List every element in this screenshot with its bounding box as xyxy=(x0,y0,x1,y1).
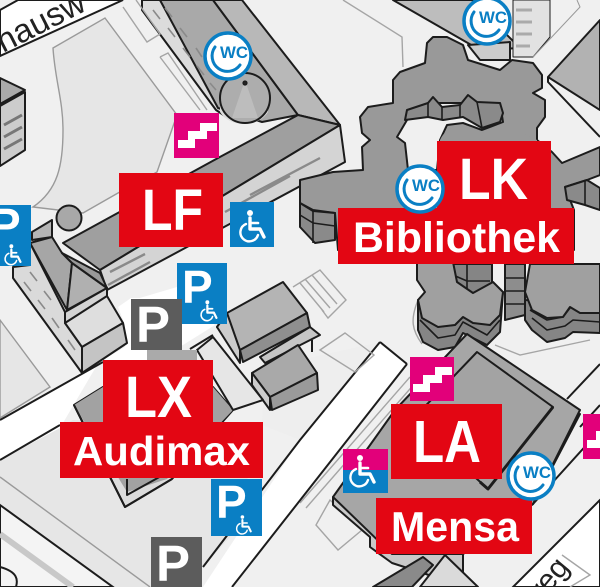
icon: WC library xyxy=(397,166,443,212)
rotunda on LF wing xyxy=(220,73,270,124)
label: LX Audimax: Audimax xyxy=(73,428,250,474)
white yard south of LF xyxy=(133,287,177,300)
label: LX Audimax xyxy=(60,360,263,478)
icon: disabled parking west xyxy=(0,199,31,266)
building: LF main wing xyxy=(63,115,345,290)
road: west arm xyxy=(0,298,215,460)
label: LF: LF xyxy=(142,178,203,243)
icon: stairs centre xyxy=(410,357,454,401)
library east facade xyxy=(565,180,600,210)
icon: parking north: P xyxy=(136,296,170,353)
building: LF west end xyxy=(13,206,127,373)
small building east of Audimax xyxy=(217,282,320,410)
road: lower left xyxy=(0,505,113,587)
icon: WC top centre xyxy=(464,0,510,44)
label: LX Audimax: LX xyxy=(125,365,192,430)
library courtyard xyxy=(397,103,503,170)
library central lobe xyxy=(440,126,537,175)
icon: disabled parking south: P xyxy=(216,476,247,528)
icon: wheelchair with lift xyxy=(343,449,388,493)
library narrow tower xyxy=(505,264,525,320)
label: LK Bibliothek: Bibliothek xyxy=(353,214,560,262)
icon: wheelchair access xyxy=(230,202,274,247)
building: top centre towers xyxy=(393,0,600,137)
icon: WC top centre: WC xyxy=(479,8,507,27)
building: left edge xyxy=(0,78,25,166)
label: LK Bibliothek: LK xyxy=(459,147,528,212)
icon: stairs east xyxy=(583,414,600,459)
lawn areas xyxy=(0,18,380,587)
icon: disabled parking centre: P xyxy=(182,261,213,313)
label: LK Bibliothek xyxy=(338,141,574,264)
building: LF north wing xyxy=(142,0,340,125)
road: bottom right with street name xyxy=(513,500,600,587)
icon: WC Mensa xyxy=(508,453,554,499)
road: central diagonal xyxy=(203,342,407,587)
icon: parking north xyxy=(131,296,182,353)
label: LA Mensa xyxy=(376,404,532,554)
building: LX Audimax xyxy=(74,337,263,507)
icon: disabled parking centre xyxy=(177,261,227,324)
library lower right roof xyxy=(525,264,600,318)
icon: parking south xyxy=(151,535,202,587)
road lines xyxy=(0,335,407,587)
label: LA Mensa: LA xyxy=(413,409,481,475)
library lower left roof xyxy=(417,262,503,327)
building: LA Mensa xyxy=(333,334,600,587)
label: LA Mensa: Mensa xyxy=(391,503,520,550)
outdoor stairs and paths xyxy=(123,0,590,587)
label: LF xyxy=(119,173,223,247)
icon: WC north xyxy=(205,33,251,79)
building: LK library xyxy=(300,37,600,350)
library main roof xyxy=(300,37,600,250)
icon: stairs north xyxy=(174,113,219,158)
icon: disabled parking south xyxy=(211,476,262,536)
library courtyard facade xyxy=(405,95,503,128)
library lower left facades xyxy=(418,292,503,350)
icon: WC Mensa: WC xyxy=(523,463,551,482)
icon: WC library: WC xyxy=(412,176,440,195)
icon: WC north: WC xyxy=(220,43,248,62)
library lower right facade xyxy=(525,285,600,342)
library west facade xyxy=(300,203,335,243)
